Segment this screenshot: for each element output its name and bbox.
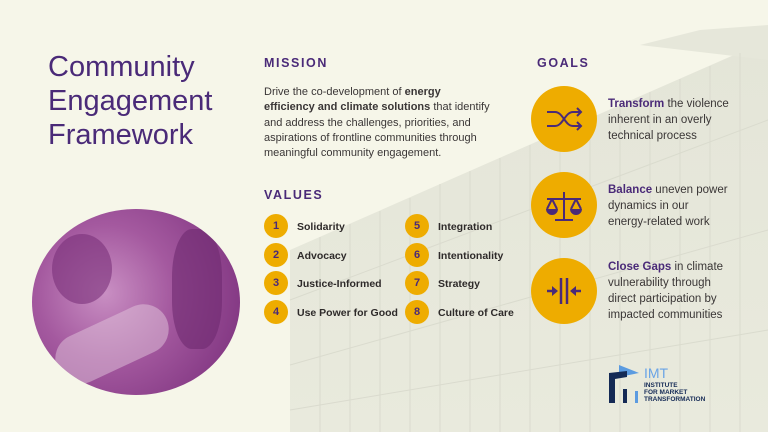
values list: 4 (273, 306, 279, 318)
mission heading: MISSION (264, 56, 328, 70)
goal text 3: direct participation by (608, 293, 717, 305)
goal text 3: impacted communities (608, 309, 722, 321)
values list: Intentionality (438, 250, 503, 262)
goal text 2: dynamics in our (608, 200, 689, 212)
goal text 1: inherent in an overly (608, 114, 712, 126)
values list: 3 (273, 277, 279, 289)
values list: 8 (414, 306, 420, 318)
goal text 3: Close Gaps in climate (608, 261, 723, 273)
values list: Solidarity (297, 221, 345, 233)
goal icon: close gaps (531, 258, 597, 324)
goal text 3 (608, 261, 723, 321)
goal text 1: Transform the violence (608, 98, 729, 110)
photo circle (32, 209, 240, 395)
values list: Justice-Informed (297, 278, 382, 290)
values list: 5 (414, 220, 420, 232)
values list: Advocacy (297, 250, 347, 262)
title: Framework (48, 119, 193, 151)
goal text 1 (608, 98, 729, 142)
values list (264, 214, 514, 324)
goal icon: scale (531, 172, 597, 238)
values list: Integration (438, 221, 492, 233)
values heading: VALUES (264, 188, 323, 202)
values list: 1 (273, 220, 279, 232)
goals heading: GOALS (537, 56, 589, 70)
logo: TRANSFORMATION (644, 396, 705, 403)
logo: INSTITUTE (644, 382, 678, 389)
goal icon: shuffle (531, 86, 597, 152)
values list: 7 (414, 277, 420, 289)
goal text 2: energy-related work (608, 216, 710, 228)
goal text 3: vulnerability through (608, 277, 711, 289)
goal text 2: Balance uneven power (608, 184, 728, 196)
goal text 2 (608, 184, 728, 228)
title: Community (48, 51, 195, 83)
values list: Culture of Care (438, 307, 514, 319)
logo: FOR MARKET (644, 389, 687, 396)
mission text: efficiency and climate solutions that identify and address the challenges, priorities, and aspirations of frontline communities through meaningful community engagement. (264, 101, 490, 159)
mission text: Drive the co-development of energy (264, 86, 441, 98)
title (48, 51, 212, 151)
goal text 1: technical process (608, 130, 697, 142)
logo: IMT (644, 365, 668, 381)
values list: Use Power for Good (297, 307, 398, 319)
values list: 2 (273, 249, 279, 261)
logo (609, 365, 705, 403)
values list: 6 (414, 249, 420, 261)
values list: Strategy (438, 278, 480, 290)
title: Engagement (48, 85, 212, 117)
